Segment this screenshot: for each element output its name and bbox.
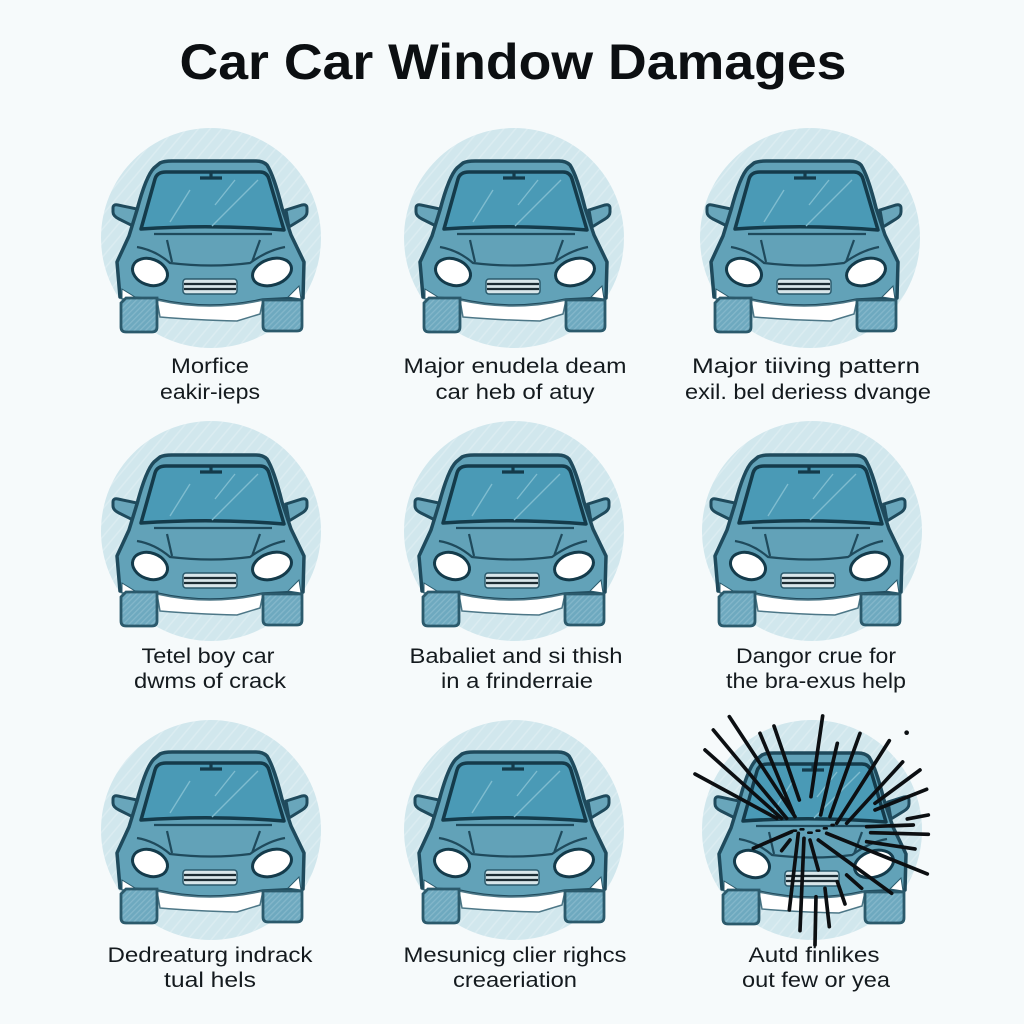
panel: damage type 8: Mesunicg clier righcs (404, 943, 626, 967)
panel: damage type 1 (101, 128, 321, 404)
panel: damage type 5: in a frinderraie (441, 669, 593, 693)
panel: damage type 4: Tetel boy car (142, 644, 274, 668)
panel: damage type 5: Babaliet and si thish (410, 644, 622, 668)
title: Car Car Window Damages (180, 34, 846, 90)
panel: damage type 1: Morfice (171, 354, 249, 378)
panel: damage type 2: car heb of atuy (436, 380, 595, 404)
panel: damage type 3: Major tiiving pattern (692, 354, 920, 378)
panel: damage type 2: Major enudela deam (404, 354, 626, 378)
panel: damage type 7: tual hels (164, 968, 256, 992)
panel: damage type 9, shattered (695, 716, 928, 992)
panel: damage type 2 (404, 128, 626, 404)
panel: damage type 6: the bra-exus help (726, 669, 906, 693)
panel: damage type 7 (101, 720, 321, 992)
panel: damage type 9, shattered: Autd finlikes (748, 943, 880, 967)
panel: damage type 8: creaeriation (453, 968, 577, 992)
panel: damage type 3: exil. bel deriess dvange (685, 380, 931, 404)
panel: damage type 6 (702, 421, 922, 693)
panel: damage type 4 (101, 421, 321, 693)
icon: crack burst (695, 716, 928, 945)
panel: damage type 1: eakir-ieps (160, 380, 260, 404)
panel: damage type 8 (404, 720, 626, 992)
panel: damage type 5 (404, 421, 624, 693)
panel: damage type 7: Dedreaturg indrack (108, 943, 313, 967)
panel: damage type 3 (685, 128, 931, 404)
panel: damage type 9, shattered: out few or yea (742, 968, 890, 992)
panel: damage type 6: Dangor crue for (736, 644, 896, 668)
panel: damage type 4: dwms of crack (134, 669, 286, 693)
